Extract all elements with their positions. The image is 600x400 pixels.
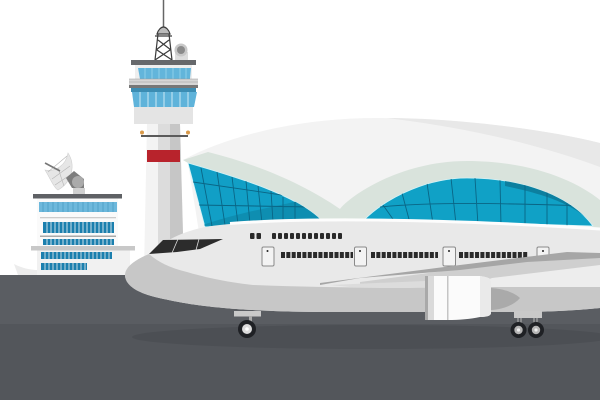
upper deck windows — [250, 233, 342, 239]
radar — [174, 44, 188, 60]
arch trim — [183, 152, 600, 228]
upper tower window — [138, 68, 191, 79]
ground shadow — [132, 325, 600, 349]
cross bar — [140, 130, 190, 137]
cockpit windshield — [149, 239, 223, 254]
radar dish — [45, 153, 85, 194]
main deck windows — [281, 252, 528, 258]
fuselage — [125, 220, 600, 312]
engine — [425, 276, 491, 320]
terminal building — [183, 118, 600, 228]
rear landing gear — [510, 311, 544, 338]
antenna mast — [155, 0, 172, 60]
balcony — [129, 79, 198, 92]
belly — [125, 254, 600, 312]
terminal roof — [183, 118, 600, 270]
doors — [262, 247, 549, 266]
left glass window — [188, 163, 325, 227]
lower tower window — [132, 92, 197, 107]
right glass window — [365, 178, 595, 228]
tower shaft — [144, 124, 184, 270]
control tower — [129, 0, 198, 270]
wing — [320, 252, 600, 287]
engine exhaust — [491, 288, 520, 310]
ground — [0, 275, 600, 400]
radar building — [14, 153, 135, 275]
front landing gear — [234, 311, 261, 338]
airplane — [125, 220, 600, 338]
